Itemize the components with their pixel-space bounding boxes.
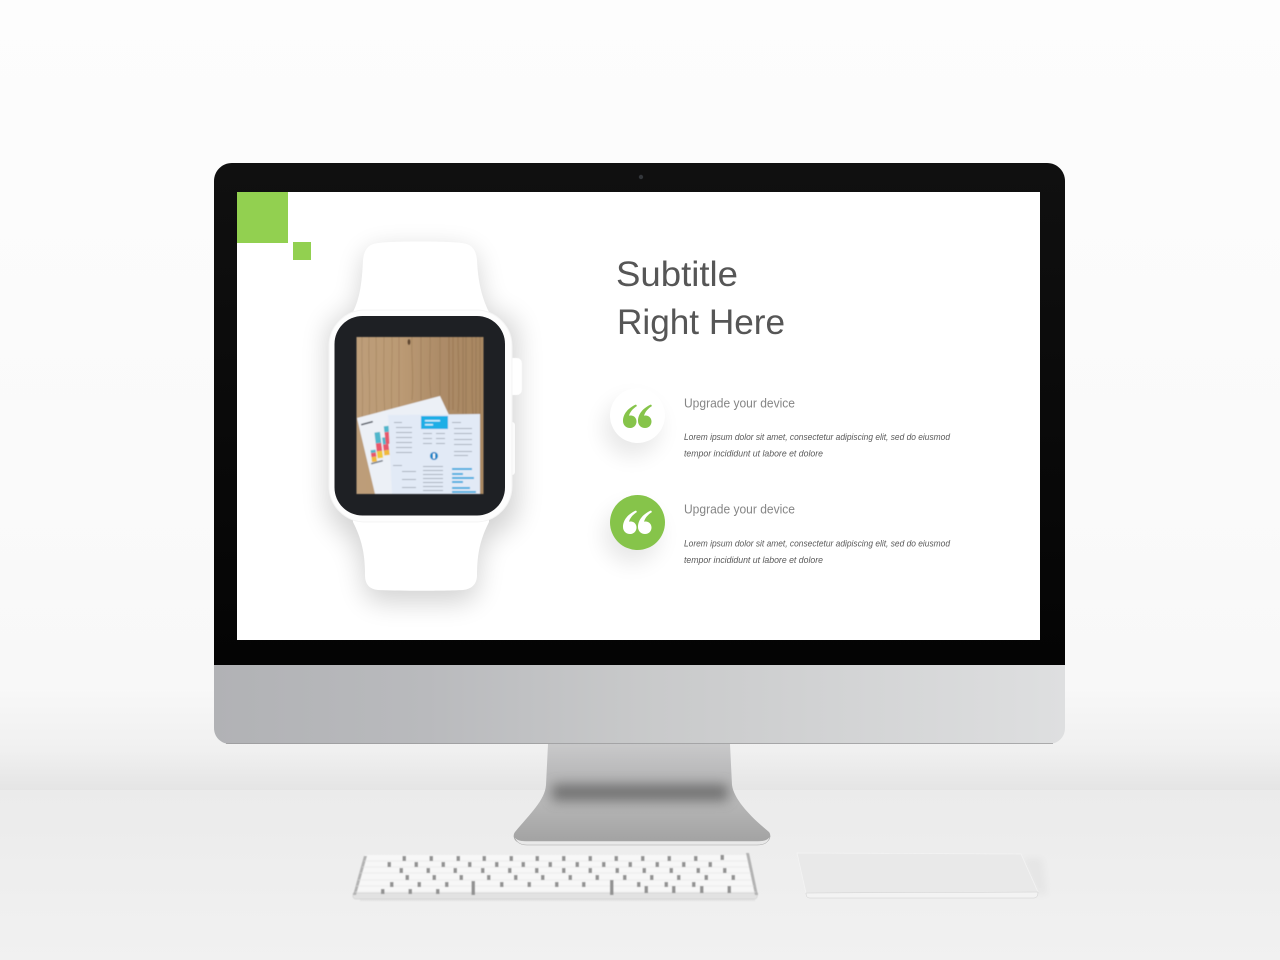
watch case	[329, 310, 512, 522]
screen panel	[237, 192, 1040, 640]
icon: quotation mark	[623, 510, 652, 534]
subtitle heading	[616, 255, 785, 342]
trackpad	[797, 853, 1048, 898]
item body text: tempor incididunt ut labore et dolore	[684, 555, 823, 565]
white circle icon	[610, 388, 665, 443]
keyboard	[353, 853, 758, 901]
blue header block	[421, 416, 448, 429]
keyboard side rails	[353, 856, 367, 895]
blue dot	[430, 452, 438, 460]
monitor casing	[214, 660, 1065, 744]
trackpad surface	[797, 853, 1038, 893]
item body text: tempor incididunt ut labore et dolore	[684, 448, 823, 458]
item body text	[684, 432, 951, 458]
trackpad shadow	[1022, 858, 1048, 895]
keyboard front edge	[353, 893, 758, 899]
watch face	[334, 316, 505, 516]
icon: quotation mark	[623, 404, 652, 428]
watch strap	[353, 242, 489, 591]
key gaps	[381, 855, 735, 895]
subtitle heading: Subtitle	[616, 255, 738, 294]
decorative small green square	[293, 242, 311, 260]
chart bars	[368, 426, 393, 462]
wood background	[356, 337, 484, 494]
trackpad front edge	[806, 892, 1038, 898]
subtitle heading: Right Here	[617, 303, 785, 342]
paper text lines	[393, 422, 472, 491]
wood grain	[362, 337, 480, 420]
key rows	[355, 861, 756, 892]
item heading: Upgrade your device	[684, 502, 795, 516]
keyboard body	[353, 855, 758, 893]
watch photo	[356, 337, 484, 494]
item body text: Lorem ipsum dolor sit amet, consectetur adipiscing elit, sed do eiusmod	[684, 538, 951, 548]
background: desk surface	[0, 790, 1280, 960]
green circle icon	[610, 495, 665, 550]
item body text	[684, 538, 951, 565]
item heading: Upgrade your device	[684, 396, 795, 410]
webcam	[639, 175, 643, 179]
back paper with chart	[357, 396, 449, 494]
monitor	[214, 163, 1065, 845]
item body text: Lorem ipsum dolor sit amet, consectetur adipiscing elit, sed do eiusmod	[684, 432, 951, 442]
keyboard shadow	[360, 894, 755, 901]
smartwatch	[327, 242, 522, 603]
monitor stand	[514, 744, 770, 845]
paper blue lines	[452, 468, 476, 493]
circle shadow	[604, 400, 660, 456]
watch crown	[506, 358, 522, 395]
monitor bezel	[214, 163, 1065, 665]
decorative large green square	[237, 192, 288, 243]
circle shadow	[604, 507, 660, 563]
front paper	[388, 414, 480, 494]
quote item 1	[604, 388, 951, 458]
quote item 2	[604, 495, 951, 565]
watch side button	[506, 422, 515, 475]
watch shadow	[327, 248, 518, 603]
